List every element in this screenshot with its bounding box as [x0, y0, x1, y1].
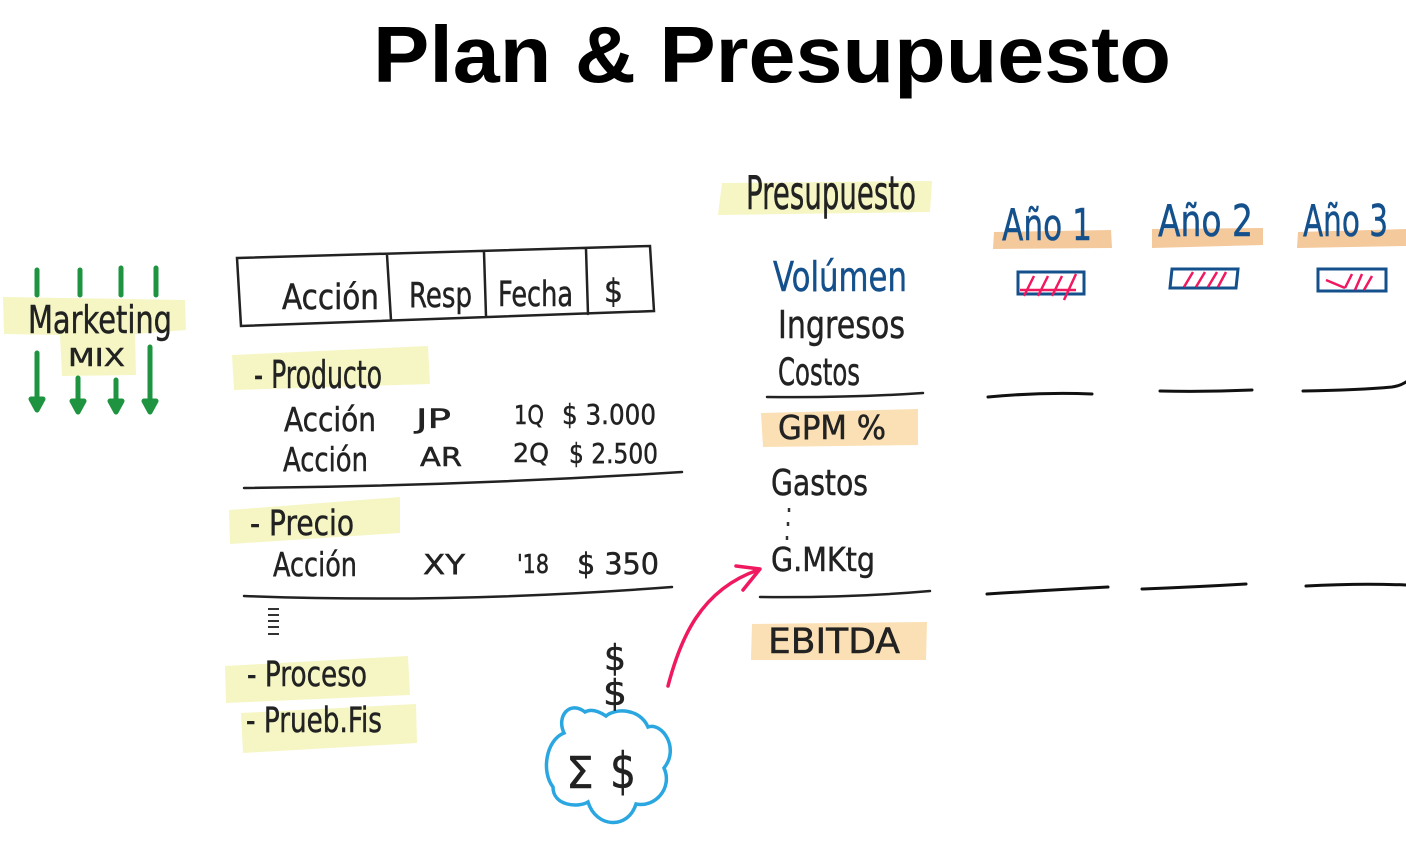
section: precio: '18: [517, 550, 549, 580]
section: producto: Acción: [283, 440, 368, 479]
section: prueba fisica: - Prueb.Fis: [246, 701, 382, 741]
heading: marketing: Marketing: [28, 298, 172, 342]
icon: green arrows down: [31, 347, 156, 412]
section: producto: $ 2.500: [569, 437, 658, 470]
section: precio: XY: [423, 548, 466, 581]
dots: [787, 508, 789, 540]
row: gastos: Gastos: [771, 463, 868, 504]
row: costos: Costos: [778, 351, 860, 394]
volume box: [1018, 272, 1084, 300]
icon: money cloud: [546, 638, 670, 823]
heading: presupuesto: [718, 166, 932, 220]
column: año 3: [1297, 196, 1406, 586]
section: producto: AR: [420, 443, 462, 473]
row: ingresos: Ingresos: [778, 303, 905, 347]
volume box: [1170, 269, 1238, 288]
column: año 1: [987, 200, 1112, 594]
icon: green arrows top stubs: [37, 268, 156, 295]
panel: budget: [718, 166, 932, 662]
arrow: budget to marketing expenses: [668, 566, 760, 686]
panel: marketing mix: [3, 268, 186, 412]
section: proceso: - Proceso: [247, 655, 367, 695]
section: producto: $ 3.000: [562, 398, 656, 431]
column: año 2: Año 2: [1158, 196, 1253, 247]
section: producto: Acción: [284, 400, 376, 439]
icon: money cloud: $: [603, 673, 627, 714]
section: precio: Acción: [273, 545, 357, 584]
icon: money cloud: $: [604, 638, 626, 679]
table header: Acción: [282, 278, 379, 318]
icon: money cloud: Σ: [566, 748, 594, 799]
column: año 1: Año 1: [1002, 200, 1092, 251]
volume box: [1318, 269, 1386, 291]
table header: $: [604, 272, 623, 310]
section: producto: JP: [413, 404, 451, 435]
section: producto: 2Q: [513, 439, 549, 469]
section: producto: - Producto: [254, 353, 382, 397]
panel: action table: [225, 246, 682, 753]
section: precio: - Precio: [250, 504, 354, 544]
ellipsis marks: [268, 609, 279, 634]
column: año 2: [1142, 196, 1263, 589]
heading: presupuesto: Presupuesto: [746, 166, 916, 220]
section: producto: 1Q: [514, 401, 544, 431]
label: mix: MIX: [68, 343, 125, 372]
icon: money cloud: $: [610, 742, 636, 800]
table header: Fecha: [498, 275, 573, 315]
table header: Resp: [409, 276, 472, 316]
section: precio: [229, 497, 672, 599]
section: producto: [232, 346, 682, 488]
row: volumen: Volúmen: [773, 253, 907, 301]
row: ebitda: EBITDA: [768, 622, 900, 662]
section: precio: $ 350: [577, 547, 659, 581]
row: gpm: GPM %: [778, 408, 886, 447]
title: Plan & Presupuesto: [373, 10, 1171, 99]
row: g. marketing: G.MKtg: [771, 540, 875, 579]
table header: [237, 246, 654, 326]
